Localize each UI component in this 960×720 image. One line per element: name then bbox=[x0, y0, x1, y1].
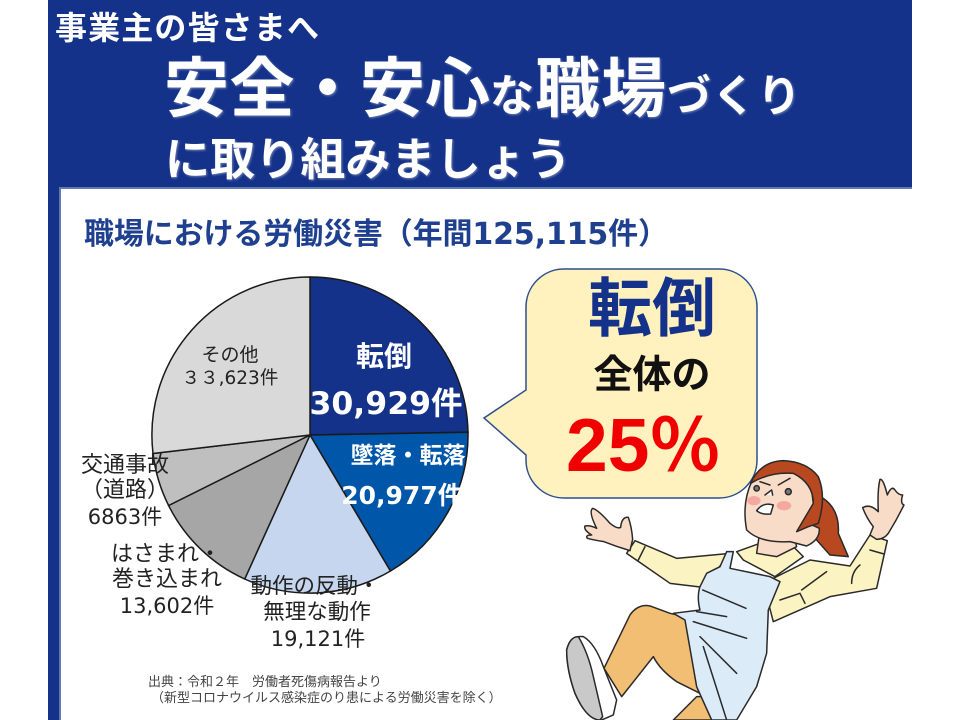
left arm sleeve bbox=[627, 541, 730, 587]
title: に取り組みましょう bbox=[165, 134, 571, 185]
title: づくり bbox=[667, 72, 801, 121]
shoe bbox=[567, 636, 617, 720]
label: falls bbox=[309, 340, 463, 422]
label: falls: 30,929件 bbox=[309, 386, 463, 422]
slice: fall from height bbox=[310, 432, 468, 571]
label: reaction and overexertion: 無理な動作 bbox=[263, 600, 371, 625]
apron bbox=[673, 552, 780, 720]
label: caught in: 13,602件 bbox=[120, 594, 214, 618]
callout: 転倒 bbox=[588, 258, 716, 350]
source note: 出典：令和２年 労働者死傷病報告より bbox=[148, 674, 382, 689]
left hand bbox=[585, 508, 633, 551]
label: fall from height: 墜落・転落 bbox=[350, 443, 466, 469]
label: other: その他 bbox=[201, 344, 259, 366]
slice: caught in bbox=[169, 435, 310, 579]
apron folds bbox=[693, 590, 747, 720]
neck bbox=[757, 530, 797, 557]
source note: （新型コロナウイルス感染症のり患による労働災害を除く） bbox=[151, 690, 502, 705]
label: reaction and overexertion: 19,121件 bbox=[271, 627, 365, 651]
label: caught in: 巻き込まれ bbox=[112, 567, 222, 592]
title: 職場 bbox=[535, 52, 666, 125]
title: 安心 bbox=[360, 52, 490, 125]
eyes bbox=[754, 486, 759, 491]
face features bbox=[757, 478, 790, 514]
title: 安全・ bbox=[164, 52, 360, 125]
collar bbox=[737, 543, 803, 577]
slice: other bbox=[152, 277, 310, 454]
callout: ％ bbox=[649, 387, 721, 492]
label: traffic: 6863件 bbox=[88, 505, 162, 529]
right arm sleeve bbox=[763, 535, 887, 622]
shoe sole bbox=[567, 637, 603, 720]
label: other bbox=[182, 344, 278, 389]
callout: 25 bbox=[566, 403, 649, 487]
label: reaction and overexertion bbox=[250, 574, 380, 651]
right hand bbox=[863, 479, 904, 539]
label: caught in: はさまれ・ bbox=[111, 542, 221, 567]
slice: falls bbox=[310, 277, 468, 435]
slice: reaction and overexertion bbox=[245, 435, 390, 593]
label: falls: 転倒 bbox=[356, 340, 412, 373]
back leg bbox=[673, 697, 712, 720]
chart heading: 職場における労働災害（年間125,115件） bbox=[84, 217, 668, 252]
label: traffic: 交通事故 bbox=[81, 453, 169, 478]
sleeve creases bbox=[638, 547, 884, 603]
hair bbox=[751, 461, 822, 532]
pie chart bbox=[152, 277, 468, 593]
head bbox=[745, 471, 819, 546]
slice: traffic bbox=[153, 435, 310, 506]
blush bbox=[747, 496, 761, 505]
callout bbox=[484, 258, 757, 498]
label: other: ３３,623件 bbox=[182, 368, 278, 389]
heading: addressee: 事業主の皆さまへ bbox=[55, 3, 319, 49]
label: traffic bbox=[81, 453, 169, 529]
callout: 全体の bbox=[593, 344, 711, 400]
label: traffic: （道路） bbox=[81, 478, 169, 503]
label: reaction and overexertion: 動作の反動・ bbox=[250, 574, 380, 599]
source note bbox=[148, 674, 502, 705]
label: caught in bbox=[111, 542, 222, 618]
front leg bbox=[604, 605, 700, 697]
panel: white content area bbox=[60, 188, 912, 720]
title: な bbox=[490, 72, 534, 121]
title bbox=[164, 52, 801, 185]
label: fall from height: 20,977件 bbox=[341, 481, 463, 510]
illustration: falling woman bbox=[567, 461, 904, 720]
label: fall from height bbox=[341, 443, 466, 510]
ponytail bbox=[810, 498, 848, 557]
